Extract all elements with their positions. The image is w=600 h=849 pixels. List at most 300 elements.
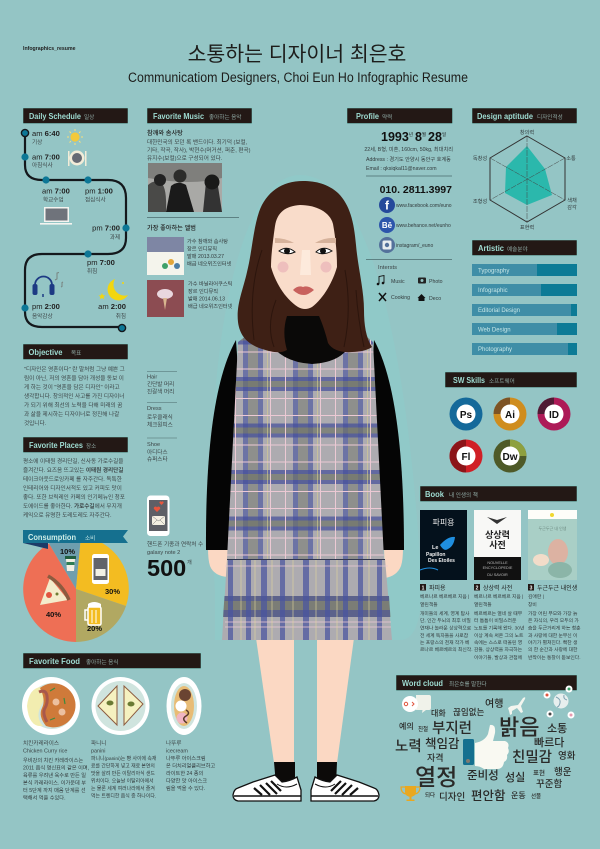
book text three: 과 사랑에 대한 눈부신 이 [528,632,577,639]
places text: 케익으로 유명한 도레도레도 자주간다. [23,511,112,519]
badge: photoshop: Ps [460,410,473,421]
schedule times: 기상 [32,138,42,146]
divider [147,216,239,218]
note: hair: 진갈색 머리 [147,388,174,396]
skirt [222,559,392,640]
food text: panini: 는 물론 세계 여러나라에서 즐겨 [91,785,155,792]
book text three: 반짝이는 통찰이 돋보인다. [528,654,581,661]
heading: word cloud [396,675,577,690]
icon: phone [92,554,109,584]
book text one: 베르나르 베르베르 지음 | [420,593,469,600]
schedule times: 학교수업 [43,196,64,204]
skill bar: infographic: Infographic [478,288,508,294]
social: facebook: www.facebook.com/euno [396,203,452,209]
book text three: 창비 [528,601,537,608]
icon: cup [65,556,76,571]
icon: house [418,294,426,301]
schedule times: pm 7:00 [87,258,115,267]
social: behance: Bē [382,221,393,230]
words: 끊임없는 [453,707,484,717]
food text: ice cream: 나뚜루 아이스크림 [166,754,206,762]
note: shoes [147,438,177,463]
hands [208,548,403,578]
ribbon heading: consumption: 소비 [85,534,95,542]
album two: 장르 인디뮤직 [188,287,218,295]
figure: woman illustration [206,181,404,801]
shoe left [233,775,301,801]
social: instagram: instagram/_euno [396,243,433,249]
heading: favorite food: Favorite Food [29,657,80,666]
words: 자격 [427,753,444,763]
objective text: 생각합니다. 창의적인 사고를 가진 디자이너 [24,392,124,400]
panel: daily schedule [21,108,130,332]
heading: word cloud: Word cloud [402,679,443,688]
book text one: 전 세계 독자들을 사로잡 [420,632,469,639]
panel: artistic [472,240,577,355]
heading: artistic [472,240,577,256]
food: curry plate [22,677,80,735]
objective text: 것입니다. [24,419,47,427]
book text three: 슴을 두근거리게 하는 청춘 [528,624,581,632]
skill bar: photography: Photography [478,347,512,353]
note: dress [147,402,177,428]
food text: panini: panini [91,748,105,754]
heading: profile [347,108,452,124]
food text: curry [23,739,89,802]
interests: Cooking [391,295,410,301]
places text: 즐겨간다. 요즈음 뜨고있는 이태원 경리단길 [23,466,123,474]
heading: objective: Objective [28,348,63,357]
icon: speech bubbles [402,695,431,713]
panel: consumption [23,530,129,642]
socks [274,762,337,785]
icon: pizza [40,576,69,605]
birth date: 년 [409,131,413,137]
food text: panini: 먹는 트렌디한 음식 중 하나이다. [91,792,156,800]
title: Communicatiom Designers, Choi Eun Ho Infographic Resume [128,70,468,85]
icon: headphones [32,272,63,297]
icon: laptop [40,207,72,225]
personal details: 22세, B형, 미혼, 160cm, 50kg, 최대치리 [364,145,453,153]
cheeks [278,262,332,272]
pie chart: 30% [105,587,120,596]
food text: panini: 료를 간단하게 넣고 재료 본연의 [91,762,155,770]
book text one: 연재나 놀라운 상상력으로 [420,624,472,632]
eyes [279,248,332,254]
birth date: 28 [428,130,442,144]
interests: Intersts [378,265,397,271]
album one: 가수 참깨와 솜사탕 [187,237,228,245]
book cover two: 사전 [489,540,506,550]
words: 표현 [533,768,545,777]
food text: panini: 위치이다. 오늘날 이탈리아에서 [91,778,154,784]
food text: curry: Chicken Curry rice [23,748,67,754]
social: instagram [379,237,433,253]
small label: Infographics_resume [23,46,76,52]
interests: Deco [429,296,441,302]
heading: favorite places [23,437,128,452]
radar chart: 조형성 [473,197,487,205]
book text two: 상상력 사전 [483,584,512,592]
food text: panini [91,739,157,800]
book text two: 속에는 스스로 떠올린 영 [474,639,522,646]
schedule times: 과제 [110,233,120,241]
objective text [24,365,125,427]
heading: favorite music [147,108,252,124]
food: ice cream plate [166,677,202,735]
book text three: 두근두근 내인생 [537,584,577,592]
phone number: 010. 2811.3997 [380,184,452,196]
objective text: 게 하는 것이 "영혼을 담은 디자인" 이라고 [24,383,120,391]
places text: 인테리어와 디자인서적도 있고 커피도 맛이 [23,484,122,492]
food: panini plate [92,677,150,735]
radar chart: 색채 [567,196,577,204]
icon: airplane [508,697,525,715]
lips [293,286,314,295]
words: 대화 [431,708,446,718]
words: 영화 [558,750,576,762]
skill bar: typography: Typography [478,268,509,274]
book text one: 1 [422,586,425,592]
heading: sw skills: SW Skills [453,376,485,385]
schedule times: 점심식사 [85,196,106,204]
social: facebook: f [385,198,390,212]
objective text: 가 되기 위해 최선의 노력을 다해 미래의 꿈 [24,401,122,409]
badge: illustrator: Ai [505,410,515,421]
words: 밝음 [499,715,539,740]
title: 소통하는 디자이너 최은호 [188,43,406,66]
heading: daily schedule: 일상 [84,113,94,121]
food text: curry: 2011 음식 명신표의 같은 이며, [23,764,89,772]
radar chart: 감각 [567,204,577,211]
book cover one: Le [432,545,438,551]
book cover one: Des Etoiles [428,558,455,564]
book text one: 개미들의 세계, 영계 탐사 [420,610,470,617]
words: 친절 [418,725,428,733]
band photo [148,163,222,212]
icon: smartphone [147,496,170,536]
heading: favorite music: 좋아하는 음악 [209,113,241,121]
birth date: 일 [442,131,446,137]
words: 노력 [395,738,422,755]
panel: favorite places [23,437,128,519]
icon: trophy [401,786,420,801]
timeline path [25,133,126,327]
book text two: 2 [476,586,479,592]
band name and text [147,129,251,162]
book text two: 열린책들 [474,601,492,608]
icon: globe network [544,686,574,718]
album one: 장르 인디뮤직 [187,244,217,252]
heading: favorite music: Favorite Music [153,112,205,121]
food text: curry: 치킨카레라이스 [23,739,59,747]
heading: objective: 목표 [71,350,81,357]
album one: 발매 2013.03.27 [187,252,224,260]
book cover two: DU SAVOIR [487,573,508,577]
book text two: 베르나르 베르베르 지음 | [474,593,523,600]
schedule times: 취침 [87,267,97,275]
heading: sw skills: 소프트웨어 [489,377,515,385]
radar chart: 창의력 [520,128,534,136]
food text: ice cream: 림을 먹을 수 있다. [166,784,205,792]
panel: sw skills [445,372,577,472]
food text: curry: 터 5단계 까지 매움 단계를 선 [23,786,86,794]
schedule times: am 7:00 [32,152,60,162]
note: dress: 로우클래식 [147,413,173,421]
skirt horizontal band [223,596,390,617]
icon: music [377,276,384,285]
note: hair: 긴단발 머리 [147,380,174,388]
albums heading: 가장 좋아하는 앨범 [147,224,196,232]
pie chart: 20% [87,624,102,633]
icon: moon [99,279,128,300]
heading: design aptitude [472,108,577,124]
book text two: 이야기들, 발상과 관점에 [474,654,522,661]
note: shoes: Shoe [147,442,160,448]
timeline nodes [21,129,130,332]
words: 예의 [399,721,414,731]
legs [256,638,354,763]
radar chart: 소통 [566,155,576,162]
food text: panini: 파니니 [91,739,106,747]
social: facebook [379,197,452,213]
radar chart: 독창성 [473,154,487,162]
personal details: Email : qksiqkal11@naver.com [366,166,437,172]
note: shoes: 슈퍼스타 [147,455,168,463]
phone contact count [147,540,203,581]
food text: ice cream: 은 더치리얼클리브하고 [166,762,215,770]
heading: artistic: 예술분야 [507,245,528,253]
book text three: 야기가 펼쳐진다. 빡찬 생 [528,639,577,646]
birth date: 8 [415,130,422,144]
book text two [474,584,524,661]
band name and text: 기타, 작곡, 작사), 박현수(머거션, 퍼춘, 편곡) [147,146,251,154]
heading: book: Book [425,490,445,499]
schedule times [32,129,126,320]
phone contact count: 개 [187,558,192,566]
schedule times: 아침식사 [32,161,53,169]
words: 부지런 [432,720,472,737]
places text: 도에이드를 좋아한다. 가로수길에서 무지개 [23,502,122,510]
heading: profile: 약력 [382,113,392,121]
book cover two: NOUVELLE [487,561,508,565]
note: dress: Dress [147,406,162,412]
heading: daily schedule: Daily Schedule [29,112,81,121]
title [128,43,468,85]
book text one: 단, 인간 두뇌의 최후 비밀 [420,617,471,624]
personal details [364,145,453,176]
album two: 가수 바닐라어쿠스틱 [188,280,233,288]
phone contact count: galaxy note 2 [147,550,180,556]
book text three: 가장 어린 부모와 가장 늙 [528,610,578,617]
face [271,205,337,309]
words: 되다 [425,791,435,799]
book text one: 르나르 베르베르의 최신작. [420,646,473,653]
heading: favorite food [23,653,201,668]
book text three: 김애란 | [528,593,544,600]
book text two: 감들, 상상력을 자극하는 [474,646,523,653]
band name and text: 참깨와 솜사탕 [147,129,183,137]
heading: sw skills [445,372,577,388]
words: 편안함 [471,788,506,803]
places text [23,457,125,519]
heading: book [420,486,577,502]
album one [147,237,232,275]
book cover one [420,510,467,580]
band name and text: 유지수(보컬)으로 구성되어 있다. [147,154,223,162]
book text one: 파피용 [429,584,446,592]
interests: Music [391,279,405,285]
schedule times: pm 7:00 [92,224,120,232]
social: behance: www.behance.net/eunho [396,223,451,229]
nose [300,250,311,275]
birth date: 1993 [381,130,409,144]
words [395,698,576,803]
interests [377,265,443,302]
food text: curry: 본식 카레라이스. 이가운데 부 [23,778,86,786]
radar chart: 표현력 [520,223,534,231]
book cover three: 두근두근 내 인생 [539,525,567,531]
schedule times: 취침 [116,312,126,320]
words: 친밀감 [512,749,552,766]
heading: daily schedule [23,108,128,124]
book cover one: Papillon [426,552,445,558]
book cover three [528,510,577,580]
book cover one: 파피용 [432,518,455,527]
places text: 평소에 이태원 경리단길, 신사동 가로수길을 [23,457,123,465]
book text three [528,584,581,661]
heading: design aptitude: Design aptitude [477,112,534,121]
eyebrows [275,238,336,243]
objective text: "디자인은 영혼이다" 란 말처럼 그냥 예쁜 그 [24,365,125,373]
album two: 배급 네오위즈인터넷 [188,302,233,310]
panel: favorite music [147,108,252,317]
book cover two: ENCYCLOPEDIE [483,566,513,570]
words: 성실 [505,771,525,784]
icon: camera [418,278,426,284]
note: hair: Hair [147,374,157,380]
radar chart [473,128,577,231]
schedule times: pm 1:00 [85,186,113,196]
album one: 배급 네오위즈인터넷 [187,260,232,268]
heading: word cloud: 최은호를 말한다 [449,680,487,688]
panel: objective [23,344,128,427]
band name and text: 대한민국의 모던 록 밴드이다. 최기덕 (보컬, [147,138,248,146]
book text two: 베르베르는 열네 살 때부 [474,610,523,617]
words: 행운 [554,766,572,778]
schedule times: 음악감상 [32,312,53,320]
icon: plate [68,150,86,166]
shoe right [311,775,379,801]
words: 빠르다 [534,736,564,749]
note: hair [147,372,177,396]
schedule times: am 7:00 [42,186,70,196]
interests: Photo [429,279,443,285]
places text: 테이크아웃드로잉카페 를 자주간다. 독특한 [23,475,122,483]
food text: ice cream: 라이트한 24 종의 [166,769,204,777]
panel: book [420,486,581,661]
personal details: Address : 경기도 안양시 동안구 호계동 [366,155,451,163]
book text one: 는 프랑스의 천재 작가 베 [420,639,469,646]
ribbon heading: consumption [23,530,128,549]
food text: ice cream: 다양한 맛 아이스크 [166,776,207,784]
phone contact count: 핸드폰 기종과 연락처 수 [147,540,203,548]
hair strands [252,250,364,347]
icon: thumbs up [463,725,509,769]
objective text: 과 삶을 제시하는 디자이너로 정진해 나갈 [24,410,119,418]
words: 디자인 [439,792,465,803]
book text two: 노트를 기록해 왔다. 30년 [474,624,524,632]
skill bar: web design: Web Design [478,328,511,334]
note: shoes: 아디다스 [147,448,168,456]
food text: ice cream: 나뚜루 [166,739,181,747]
words: 여행 [485,698,503,710]
heading: objective [23,344,128,360]
heading: book: 내 인생의 책 [449,491,478,499]
objective text: 림이 아닌, 저의 영혼을 담아 개성을 동보 이 [24,374,124,382]
schedule times: am 6:40 [32,129,60,138]
food text: curry: 우비강의 치킨 카레라이스는 [23,756,83,764]
food text: panini: 맛을 살려 만든 이탈리아식 샌드 [91,770,155,777]
words: 책임감 [425,736,460,751]
badge: dreamweaver: Dw [502,452,518,463]
panel: favorite food [22,653,215,802]
book text two: 터 틈틈이 비밀스러운 [474,617,517,624]
background halo behind figure [211,175,421,640]
food text: ice cream: icecream [166,748,188,754]
book text three: 의 한 순간과 사랑에 대한 [528,646,578,653]
heading: profile: Profile [356,112,379,121]
dress bodice [227,336,384,559]
words: 선물 [531,792,541,800]
food text: ice cream [166,739,215,792]
neck and turtleneck [268,300,352,364]
places text: 좋다. 또한 브릭레인 카페의 인기메뉴인 청포 [23,493,125,501]
ribbon heading: consumption: Consumption [28,533,76,542]
social: behance [379,217,451,233]
words: 꾸준함 [536,778,562,790]
book cover two [474,510,521,580]
pie chart [23,536,129,642]
hair [238,181,372,352]
skill bar: editorial design: Editorial Design [478,308,520,314]
book text three: 은 자식의, 우리 모두의 가 [528,617,579,624]
icon: sun [67,129,83,145]
words: 준비성 [467,769,499,782]
album two [147,280,233,317]
badge: flash: Fl [462,452,471,463]
food text: panini: 파니니(panini)는 빵 사이에 속재 [91,755,157,762]
note: dress: 체크원피스 [147,420,173,428]
pie chart: 40% [46,610,61,619]
heading: artistic: Artistic [478,244,505,253]
icon: beer [85,602,101,625]
heading: favorite places: 장소 [86,443,96,450]
schedule times: am 2:00 [98,302,126,311]
panel: profile [347,108,453,302]
heading: favorite food: 좋아하는 음식 [86,658,118,666]
heading: design aptitude: 디자인적성 [537,113,563,121]
words: 운동 [511,791,526,800]
badge: indesign: ID [549,410,559,421]
phone contact count: 500 [147,555,186,581]
heading: favorite places: Favorite Places [29,441,84,450]
sleeves [206,340,404,550]
skirt stripes [228,560,382,640]
book text one: 열린책들 [420,601,438,608]
panel: style notes [147,372,203,581]
panel: design aptitude [472,108,577,231]
